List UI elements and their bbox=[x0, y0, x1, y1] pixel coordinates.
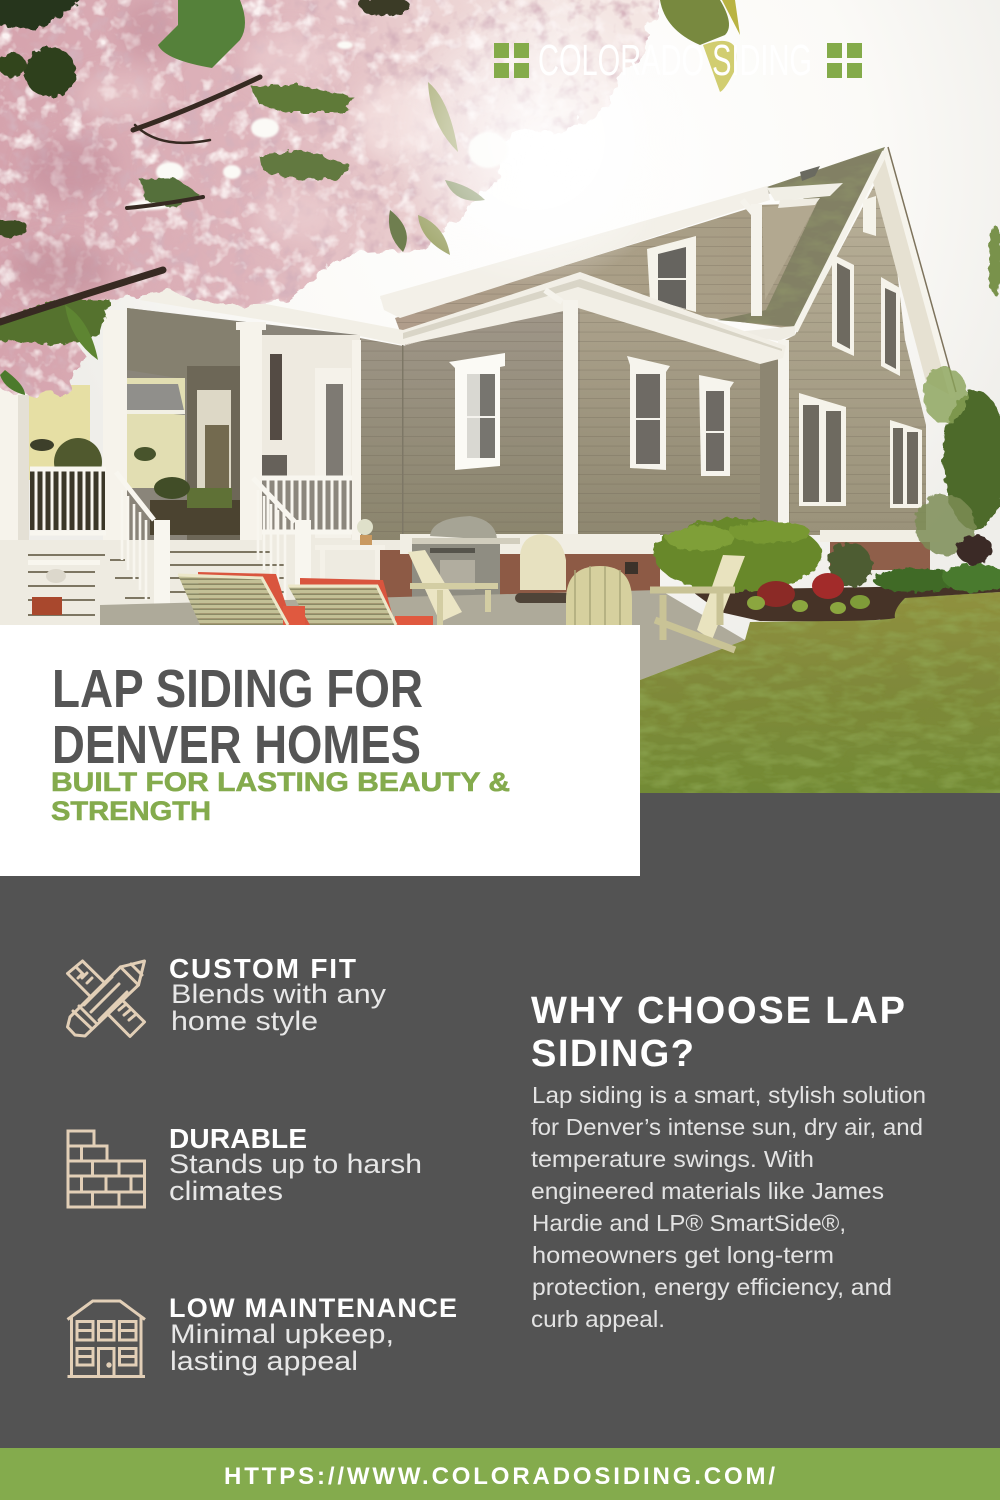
body text: temperature swings. With bbox=[531, 1146, 814, 1172]
branches bbox=[0, 77, 260, 322]
benefit: low maintenance bbox=[68, 1293, 457, 1376]
logo wordmark: COLORADO SIDING bbox=[538, 36, 812, 85]
dormer-storey window bbox=[647, 236, 696, 312]
stair rails bbox=[116, 472, 303, 610]
lounge chairs bbox=[178, 572, 433, 625]
benefit text: Blends with any bbox=[171, 979, 387, 1009]
panel: benefits bbox=[68, 953, 457, 1376]
logo right mark bbox=[827, 43, 862, 78]
top-right olive leaf bbox=[660, 0, 740, 92]
benefit text bbox=[171, 979, 387, 1036]
subtitle bbox=[51, 767, 510, 826]
lower cornice bbox=[140, 272, 786, 540]
heading: title: DENVER HOMES bbox=[52, 715, 421, 775]
gable rake and dormer eave bbox=[735, 152, 885, 341]
logo bbox=[494, 36, 862, 85]
benefit text bbox=[169, 1149, 422, 1206]
benefit text: home style bbox=[171, 1006, 318, 1036]
heading: title: LAP SIDING FOR bbox=[52, 659, 423, 719]
large-scale blossom shading bbox=[10, 0, 445, 298]
lower block wall bbox=[578, 305, 790, 540]
footer bar bbox=[0, 1448, 1000, 1500]
benefit text bbox=[170, 1319, 394, 1376]
heading: WHY CHOOSE LAP bbox=[531, 990, 905, 1032]
shingle roof bbox=[717, 147, 885, 327]
neighbouring yellow house bbox=[28, 378, 185, 488]
gable wall bbox=[785, 147, 956, 535]
sun glare bbox=[385, 0, 685, 290]
porch railings bbox=[30, 469, 352, 533]
heading: SIDING? bbox=[531, 1033, 694, 1075]
brick base and white trim bbox=[380, 530, 940, 605]
benefit heading: LOW MAINTENANCE bbox=[169, 1293, 457, 1323]
benefit text: Minimal upkeep, bbox=[170, 1319, 394, 1349]
panel: title card bbox=[0, 625, 640, 876]
subtitle: BUILT FOR LASTING BEAUTY & bbox=[51, 767, 510, 797]
side windows bbox=[627, 356, 734, 476]
right-side tree bbox=[915, 225, 1000, 565]
panel: why choose lap siding bbox=[531, 990, 926, 1332]
icon: ruler and pencil bbox=[68, 961, 144, 1036]
footer url: HTTPS://WWW.COLORADOSIDING.COM/ bbox=[224, 1463, 775, 1490]
subtitle: STRENGTH bbox=[51, 796, 211, 826]
porch dark interior and furniture bbox=[30, 470, 352, 535]
porch stairs bbox=[0, 519, 415, 625]
benefit text: climates bbox=[169, 1176, 283, 1206]
benefit heading: CUSTOM FIT bbox=[169, 953, 356, 984]
photo: house and garden bbox=[0, 0, 1000, 793]
mulch bed bbox=[690, 585, 1000, 621]
upper gutter and downpipe bbox=[380, 186, 770, 318]
body text: Hardie and LP® SmartSide®, bbox=[532, 1210, 846, 1236]
patio gravel bbox=[100, 590, 745, 700]
icon: house bbox=[68, 1301, 145, 1376]
gable vent and windows bbox=[799, 196, 922, 508]
body text: protection, energy efficiency, and bbox=[532, 1274, 892, 1300]
upper storey wall bbox=[395, 203, 820, 345]
blossom mass bbox=[0, 0, 670, 395]
porch columns bbox=[0, 310, 361, 625]
large leaves bbox=[0, 0, 485, 395]
body text: engineered materials like James bbox=[531, 1178, 884, 1204]
benefit: durable bbox=[68, 1123, 422, 1207]
body text: Lap siding is a smart, stylish solution bbox=[532, 1082, 926, 1108]
body text: curb appeal. bbox=[531, 1306, 665, 1332]
sky gaps between blossoms bbox=[128, 41, 508, 210]
flowers bbox=[747, 573, 870, 614]
benefit heading: DURABLE bbox=[169, 1123, 307, 1154]
benefit text: lasting appeal bbox=[170, 1346, 358, 1376]
body text: for Denver’s intense sun, dry air, and bbox=[531, 1114, 923, 1140]
body text bbox=[531, 1082, 926, 1332]
icon: brick wall bbox=[68, 1131, 144, 1207]
logo left mark bbox=[494, 43, 529, 78]
heading bbox=[531, 990, 905, 1075]
grill bbox=[412, 516, 520, 597]
benefit text: Stands up to harsh bbox=[169, 1149, 422, 1179]
left wing wall bbox=[360, 295, 580, 540]
patio chairs bbox=[408, 534, 745, 650]
porch interior bbox=[127, 308, 360, 545]
body text: homeowners get long-term bbox=[532, 1242, 834, 1268]
benefit: custom fit bbox=[68, 953, 387, 1036]
blossom tree bbox=[0, 0, 740, 395]
heading: title bbox=[52, 659, 423, 775]
lawn bbox=[640, 592, 1000, 793]
foliage bbox=[0, 0, 410, 345]
main roof strip bbox=[380, 187, 775, 306]
shrubs bbox=[654, 518, 1000, 592]
